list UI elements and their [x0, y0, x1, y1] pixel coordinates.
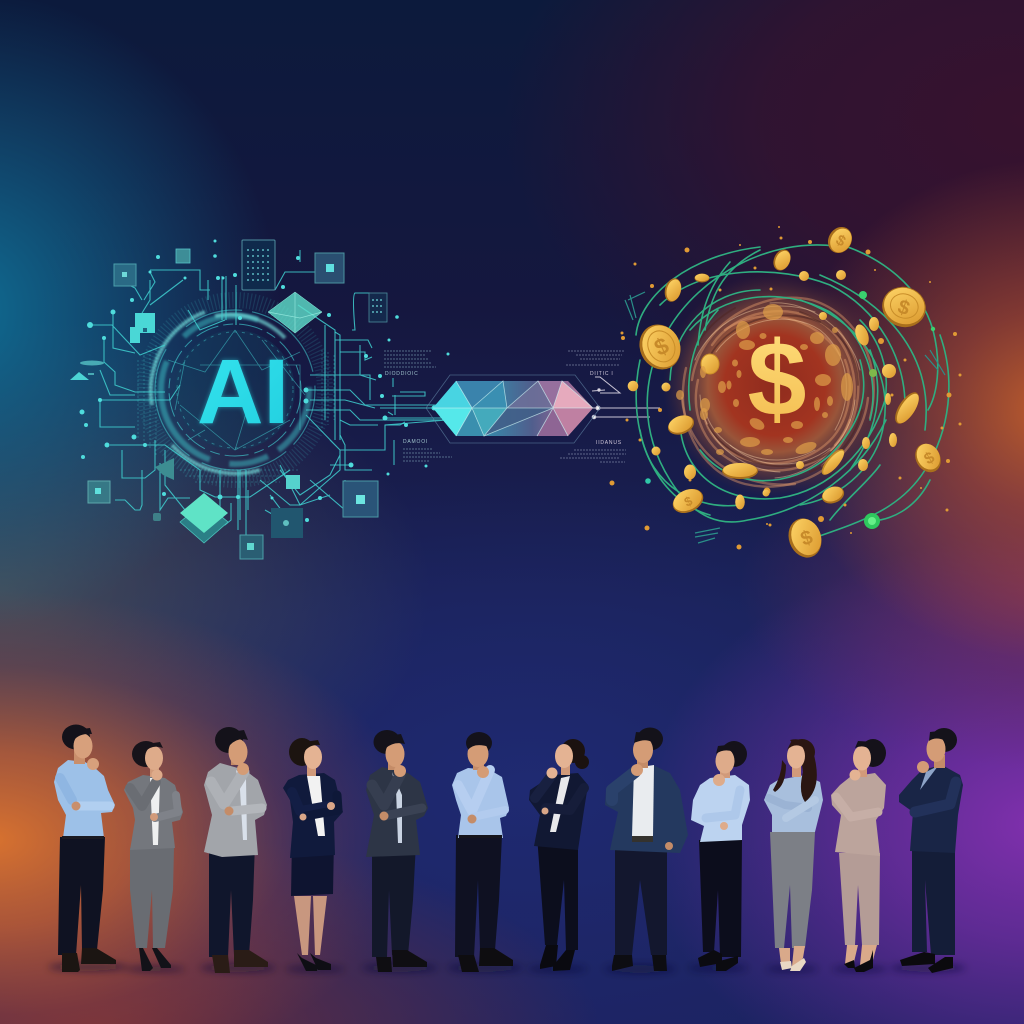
person 12: man in dark navy suit	[899, 728, 963, 973]
gold coins: $	[650, 332, 673, 361]
gold coins: $	[833, 231, 849, 251]
person 6: man in pale blue shirt	[452, 732, 513, 972]
gold coins: $	[922, 449, 938, 468]
swirling streaks	[682, 298, 874, 487]
money vortex	[610, 223, 962, 562]
data caption right bottom: IIDANUS	[596, 440, 622, 446]
person 11: woman in beige suit	[831, 739, 886, 972]
vortex core	[663, 273, 887, 497]
person 2: woman in grey suit	[124, 741, 183, 971]
AI letters: AI	[197, 341, 289, 443]
person 7: woman in black suit with bun	[529, 739, 589, 971]
person 9: person in pale shirt	[691, 741, 750, 971]
gold coins: $	[682, 493, 695, 510]
data caption left bottom	[403, 439, 452, 461]
data caption right bottom	[560, 440, 626, 462]
gold coins	[628, 223, 946, 562]
person 10: woman with long hair in grey trousers	[764, 739, 823, 971]
stacked layers icon	[180, 493, 228, 543]
circuit ring	[138, 300, 334, 482]
gold coins: $	[798, 526, 816, 551]
person 5: man in charcoal blazer	[366, 730, 428, 972]
AI circuit emblem	[70, 240, 454, 559]
green dots	[645, 291, 935, 529]
data caption left top	[384, 351, 436, 377]
floor shadow	[48, 963, 966, 973]
data caption left top: DIODDIOIC	[385, 371, 419, 377]
person 4: woman in navy jacket and skirt	[283, 738, 343, 971]
gold coins: $	[895, 296, 912, 320]
person 3: man in light grey blazer	[204, 727, 268, 973]
circuit traces	[90, 250, 454, 535]
circuit nodes	[80, 240, 450, 529]
crystal prism	[426, 375, 600, 443]
data caption right top	[566, 351, 625, 377]
data caption right top: DIITIC I	[590, 371, 614, 377]
AI letters: AI	[197, 341, 289, 443]
data caption left bottom: DAMOOI	[403, 439, 428, 445]
dollar sign: $	[748, 320, 806, 438]
green orbit lines	[636, 245, 949, 540]
chips and tiles	[70, 240, 387, 559]
person 1: man in light blue shirt	[54, 724, 116, 972]
person 8: man in navy suit hand in pocket	[605, 728, 688, 971]
connector lines right	[592, 377, 660, 419]
particles	[610, 226, 962, 550]
